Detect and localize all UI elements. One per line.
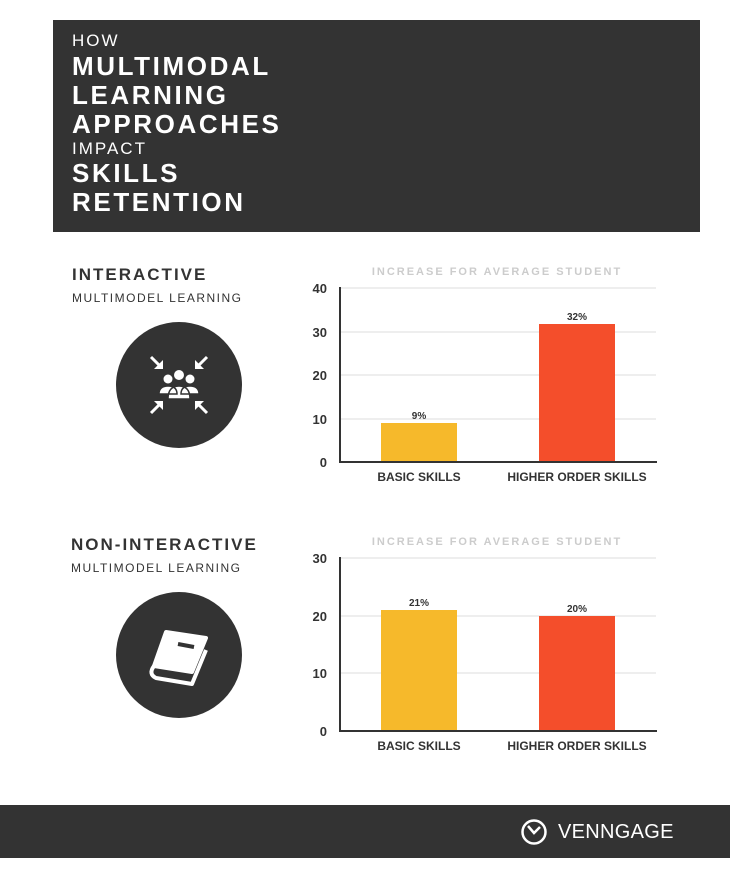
title: LEARNING [72, 80, 229, 110]
chart: non-interactive: 20 [313, 609, 327, 624]
title: MULTIMODAL [72, 51, 271, 81]
section heading: interactive [72, 265, 243, 305]
chart: non-interactive: 21% [409, 598, 429, 609]
chart: interactive: 40 [313, 281, 327, 296]
chart: interactive: 32% [567, 312, 587, 323]
title: APPROACHES [72, 109, 281, 139]
chart: non-interactive: BASIC SKILLS [377, 739, 461, 753]
title: RETENTION [72, 187, 246, 217]
chart: interactive: BASIC SKILLS [377, 470, 461, 484]
chart: non-interactive [312, 536, 657, 753]
chart: non-interactive: HIGHER ORDER SKILLS [507, 739, 647, 753]
chart: non-interactive: 20% [567, 604, 587, 615]
title [72, 31, 281, 217]
chart: non-interactive: 10 [313, 666, 327, 681]
title: IMPACT [72, 139, 147, 158]
logo [521, 819, 674, 845]
chart: non-interactive: INCREASE FOR AVERAGE STUDENT [372, 536, 622, 548]
icon: group with arrows [116, 322, 242, 448]
chart: non-interactive: 0 [320, 724, 327, 739]
title: HOW [72, 31, 120, 50]
chart: interactive: INCREASE FOR AVERAGE STUDENT [372, 266, 622, 278]
footer [0, 805, 730, 858]
header panel [53, 20, 700, 232]
chart: interactive: 0 [320, 455, 327, 470]
chart: interactive: 20 [313, 368, 327, 383]
section heading: interactive: MULTIMODEL LEARNING [72, 291, 243, 305]
logo: VENNGAGE [558, 820, 674, 842]
chart: interactive: 9% [412, 411, 426, 422]
section heading: interactive: INTERACTIVE [72, 265, 207, 284]
title: SKILLS [72, 158, 180, 188]
chart: interactive [312, 266, 657, 484]
icon: book [116, 592, 242, 718]
section heading: non-interactive: NON-INTERACTIVE [71, 535, 258, 554]
chart: interactive: 10 [313, 412, 327, 427]
chart: non-interactive: 30 [313, 551, 327, 566]
chart: interactive: HIGHER ORDER SKILLS [507, 470, 647, 484]
section heading: non-interactive [71, 535, 258, 575]
chart: interactive: 30 [313, 325, 327, 340]
section heading: non-interactive: MULTIMODEL LEARNING [71, 561, 242, 575]
